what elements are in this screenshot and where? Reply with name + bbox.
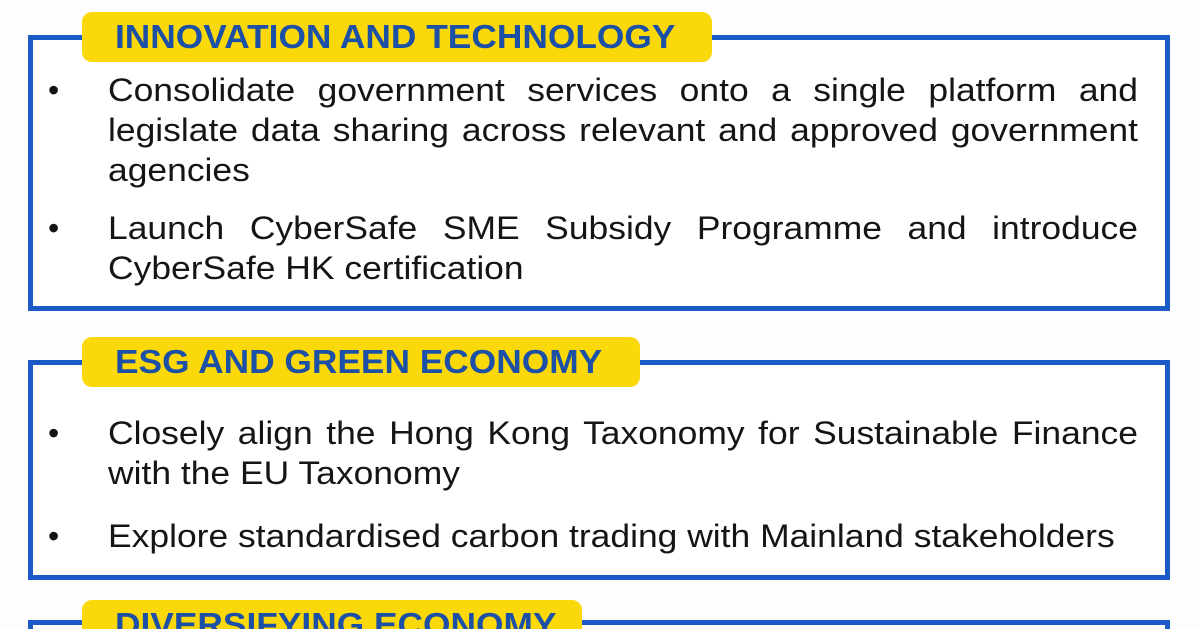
text: carbon trading: Explore standardised carbon trading with Mainland stakeholders <box>108 518 1115 554</box>
panel: ESG and green economy <box>28 360 1170 580</box>
bullet 3: • <box>48 415 59 451</box>
text: cybersafe: Launch CyberSafe SME Subsidy Programme and introduce <box>108 210 1138 246</box>
text: consolidate services: Consolidate government services onto a single platform and <box>108 72 1138 108</box>
text: taxonomy: Closely align the Hong Kong Taxonomy for Sustainable Finance <box>108 415 1138 451</box>
heading: ESG and green economy: ESG AND GREEN ECONOMY <box>115 343 602 380</box>
bullet 1: • <box>48 72 59 108</box>
heading: innovation and technology <box>82 12 712 62</box>
text: consolidate services: agencies <box>108 152 250 188</box>
text: taxonomy <box>108 415 1138 491</box>
bullet 4: • <box>48 518 59 554</box>
bullet 2: • <box>48 210 59 246</box>
panel: diversifying economy <box>28 620 1170 629</box>
heading: ESG and green economy <box>82 337 640 387</box>
text: cybersafe <box>108 210 1138 286</box>
heading: innovation and technology: INNOVATION AND TECHNOLOGY <box>115 18 675 55</box>
text: consolidate services: legislate data sharing across relevant and approved government <box>108 112 1138 148</box>
text: cybersafe: CyberSafe HK certification <box>108 250 524 286</box>
text: consolidate services <box>108 72 1138 188</box>
panel: innovation and technology <box>28 35 1170 311</box>
text: taxonomy: with the EU Taxonomy <box>108 455 460 491</box>
